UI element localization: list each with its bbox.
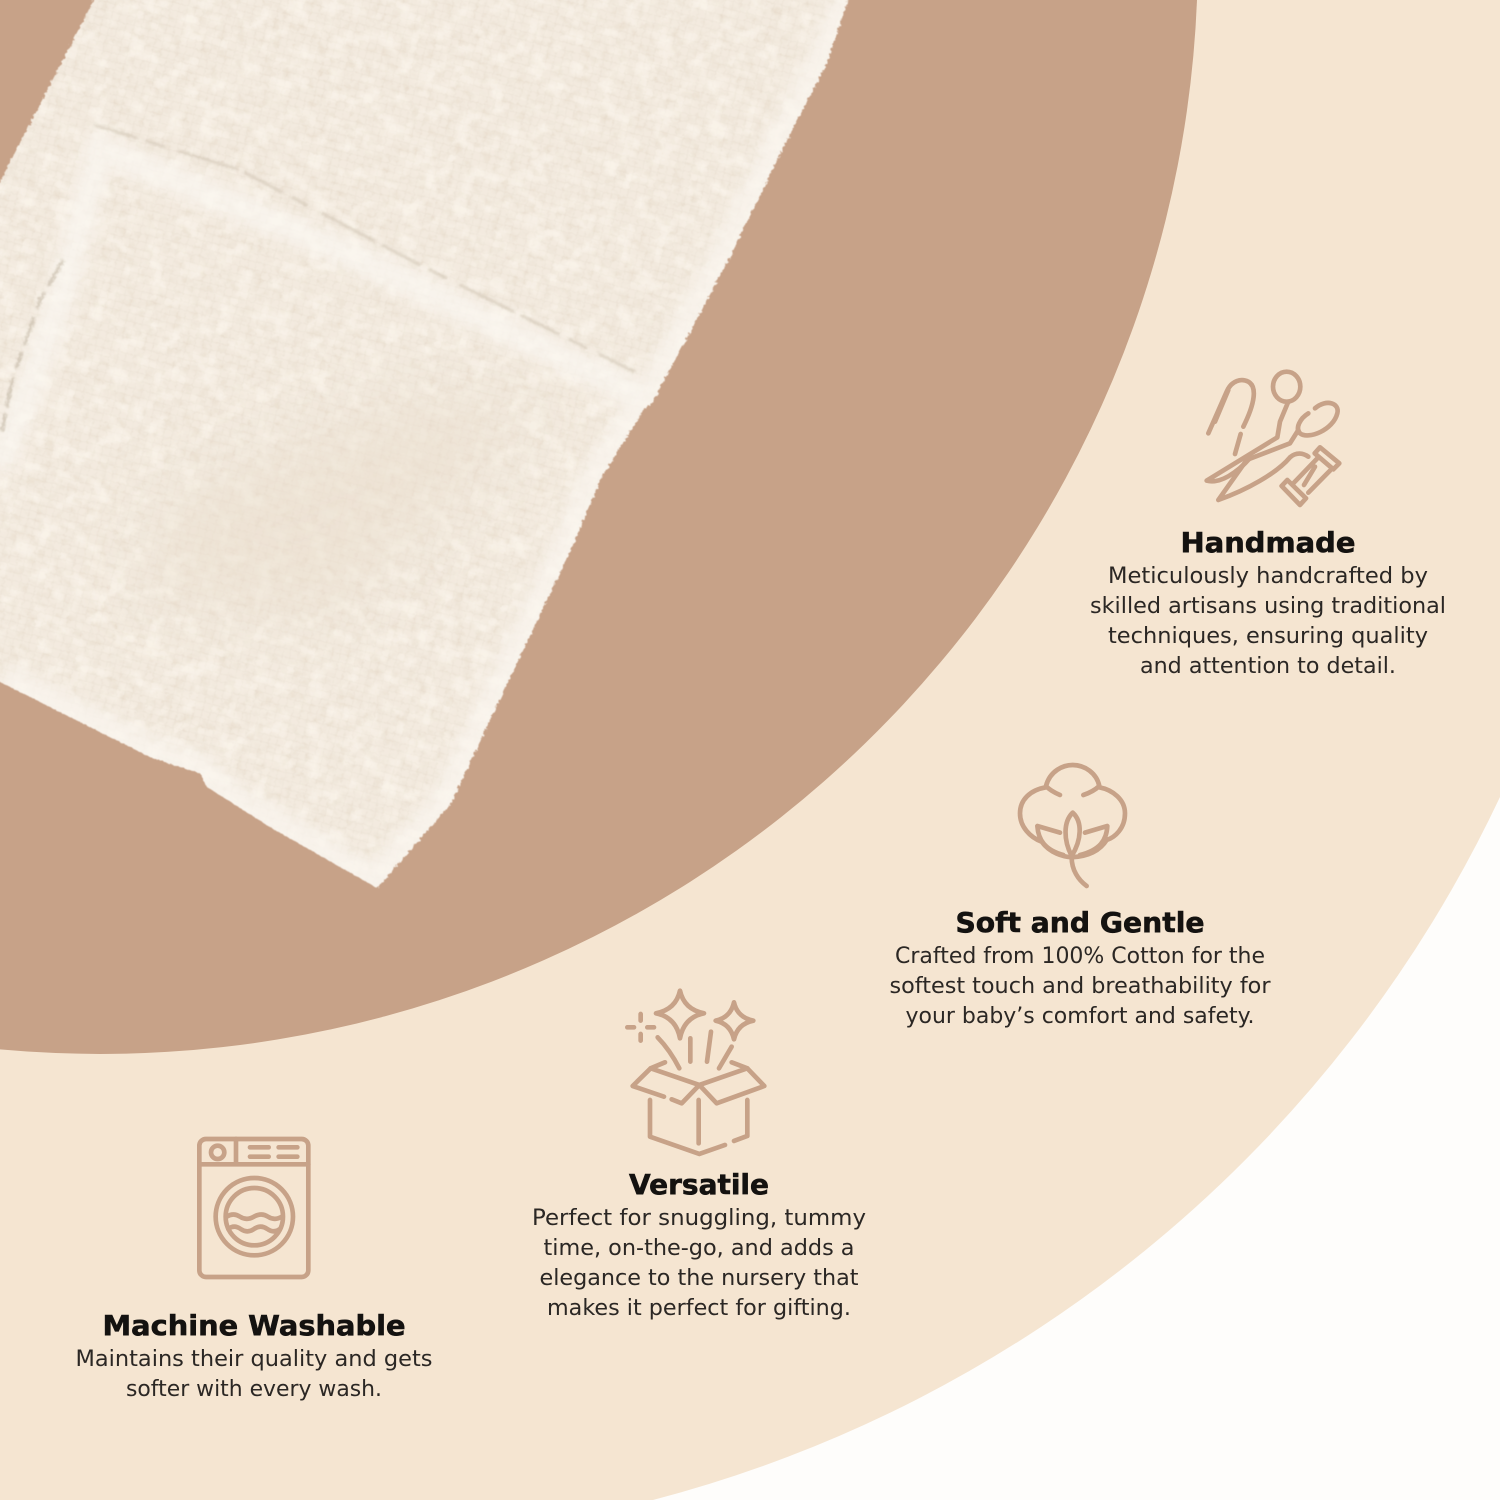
description: Machine Washable: Maintains their quality and gets: [76, 1347, 433, 1372]
photo: cotton blanket: [0, 0, 860, 900]
heading: Soft and Gentle: Soft and Gentle: [956, 906, 1204, 939]
description: Versatile: time, on-the-go, and adds a: [544, 1236, 854, 1261]
description: Soft and Gentle: Crafted from 100% Cotton for the: [895, 944, 1265, 969]
description: Versatile: elegance to the nursery that: [540, 1266, 859, 1291]
description: Versatile: Perfect for snuggling, tummy: [532, 1206, 866, 1231]
heading: Machine Washable: Machine Washable: [102, 1309, 406, 1342]
feature: Soft and Gentle: [890, 765, 1271, 1029]
description: Handmade: skilled artisans using traditional: [1090, 594, 1446, 619]
description: Versatile: makes it perfect for gifting.: [547, 1296, 851, 1321]
heading: Handmade: Handmade: [1180, 526, 1356, 559]
description: Soft and Gentle: your baby’s comfort and safety.: [906, 1004, 1254, 1029]
icon: scissors, needle and thread spool: [1207, 372, 1339, 505]
feature: Versatile: [532, 991, 866, 1321]
description: Handmade: Meticulously handcrafted by: [1108, 564, 1428, 589]
description: Versatile: [532, 1206, 866, 1321]
description: Handmade: and attention to detail.: [1140, 654, 1396, 679]
description: Handmade: techniques, ensuring quality: [1108, 624, 1428, 649]
description: Machine Washable: [76, 1347, 433, 1402]
icon: open gift box with sparkles: [627, 991, 764, 1154]
tan inner circle: [0, 0, 1197, 1054]
icon: cotton boll: [1020, 765, 1125, 886]
description: Handmade: [1090, 564, 1446, 679]
feature: Handmade: [1090, 372, 1446, 679]
feature: Machine Washable: [76, 1139, 433, 1402]
heading: Versatile: Versatile: [629, 1168, 769, 1201]
icon: washing machine: [199, 1139, 308, 1277]
description: Soft and Gentle: softest touch and breathability for: [890, 974, 1271, 999]
description: Soft and Gentle: [890, 944, 1271, 1029]
description: Machine Washable: softer with every wash.: [126, 1377, 382, 1402]
